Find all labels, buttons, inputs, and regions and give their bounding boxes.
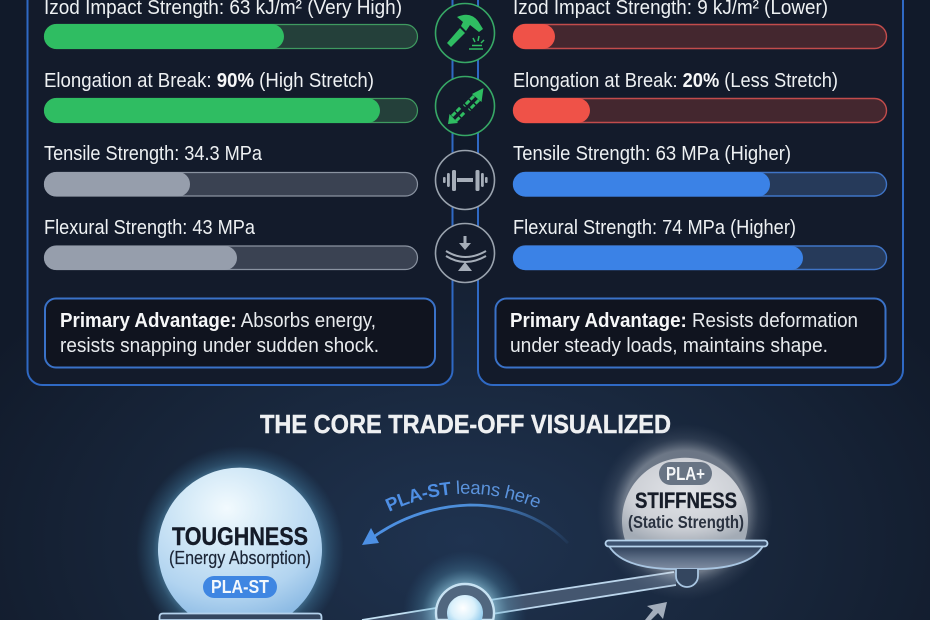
sphere: toughness with PLA-ST: (Energy Absorption) [169,548,311,568]
callout: PLA-ST primary advantage [45,298,435,368]
heading: the core trade-off visualized: THE CORE TRADE-OFF VISUALIZED [260,411,671,439]
sphere: stiffness with PLA+ [597,424,773,600]
panel: PLA-ST properties [28,0,452,385]
sphere: toughness with PLA-ST: TOUGHNESS [172,523,308,551]
panel: PLA+ properties [478,0,903,385]
bar: flexural strength PLA+: Flexural Strength: 74 MPa (Higher) [513,217,796,239]
bar: Izod impact strength PLA-ST [44,0,418,49]
bar: flexural strength PLA-ST [44,217,418,270]
left scale plate [160,614,322,620]
balance beam [362,572,676,620]
icon: flexural bending [436,224,494,282]
sphere: toughness with PLA-ST [136,446,344,620]
bar: tensile strength PLA+ [513,143,886,196]
pill: PLA-ST: PLA-ST [211,577,269,597]
bar: tensile strength PLA-ST [44,143,418,196]
bar: flexural strength PLA-ST: Flexural Strength: 43 MPa [44,217,256,239]
bar: flexural strength PLA+ [513,217,886,270]
bar: elongation at break PLA-ST [44,70,418,123]
callout: PLA-ST primary advantage: Primary Advantage: Absorbs energy, [60,310,376,332]
callout: PLA+ primary advantage: under steady loads, maintains shape. [510,335,828,357]
sphere: stiffness with PLA+: (Static Strength) [628,512,744,532]
annotation: PLA-ST leans here with arc arrow [362,480,568,545]
callout: PLA+ primary advantage [496,298,886,368]
icon: hammer impact [436,4,494,62]
pill: PLA+: PLA+ [666,464,705,484]
bar: tensile strength PLA-ST: Tensile Strength: 34.3 MPa [44,143,263,165]
callout: PLA-ST primary advantage: resists snapping under sudden shock. [60,335,379,357]
bar: Izod impact strength PLA+ [513,0,886,49]
right scale pan [606,540,768,587]
icon: dumbbell [436,150,494,210]
callout: PLA+ primary advantage: Primary Advantage: Resists deformation [510,310,858,332]
arrow: stiffness side rising [645,602,667,620]
sphere: stiffness with PLA+: STIFFNESS [635,488,737,513]
icon: stretch arrows [436,76,494,136]
annotation: PLA-ST leans here with arc arrow: PLA-ST leans here [385,480,540,512]
bar: elongation at break PLA+: Elongation at Break: 20% (Less Stretch) [513,70,838,92]
bar: tensile strength PLA+: Tensile Strength: 63 MPa (Higher) [513,143,791,165]
bar: elongation at break PLA+ [513,70,886,123]
bar: elongation at break PLA-ST: Elongation at Break: 90% (High Stretch) [44,70,374,92]
pivot of balance [403,551,527,620]
